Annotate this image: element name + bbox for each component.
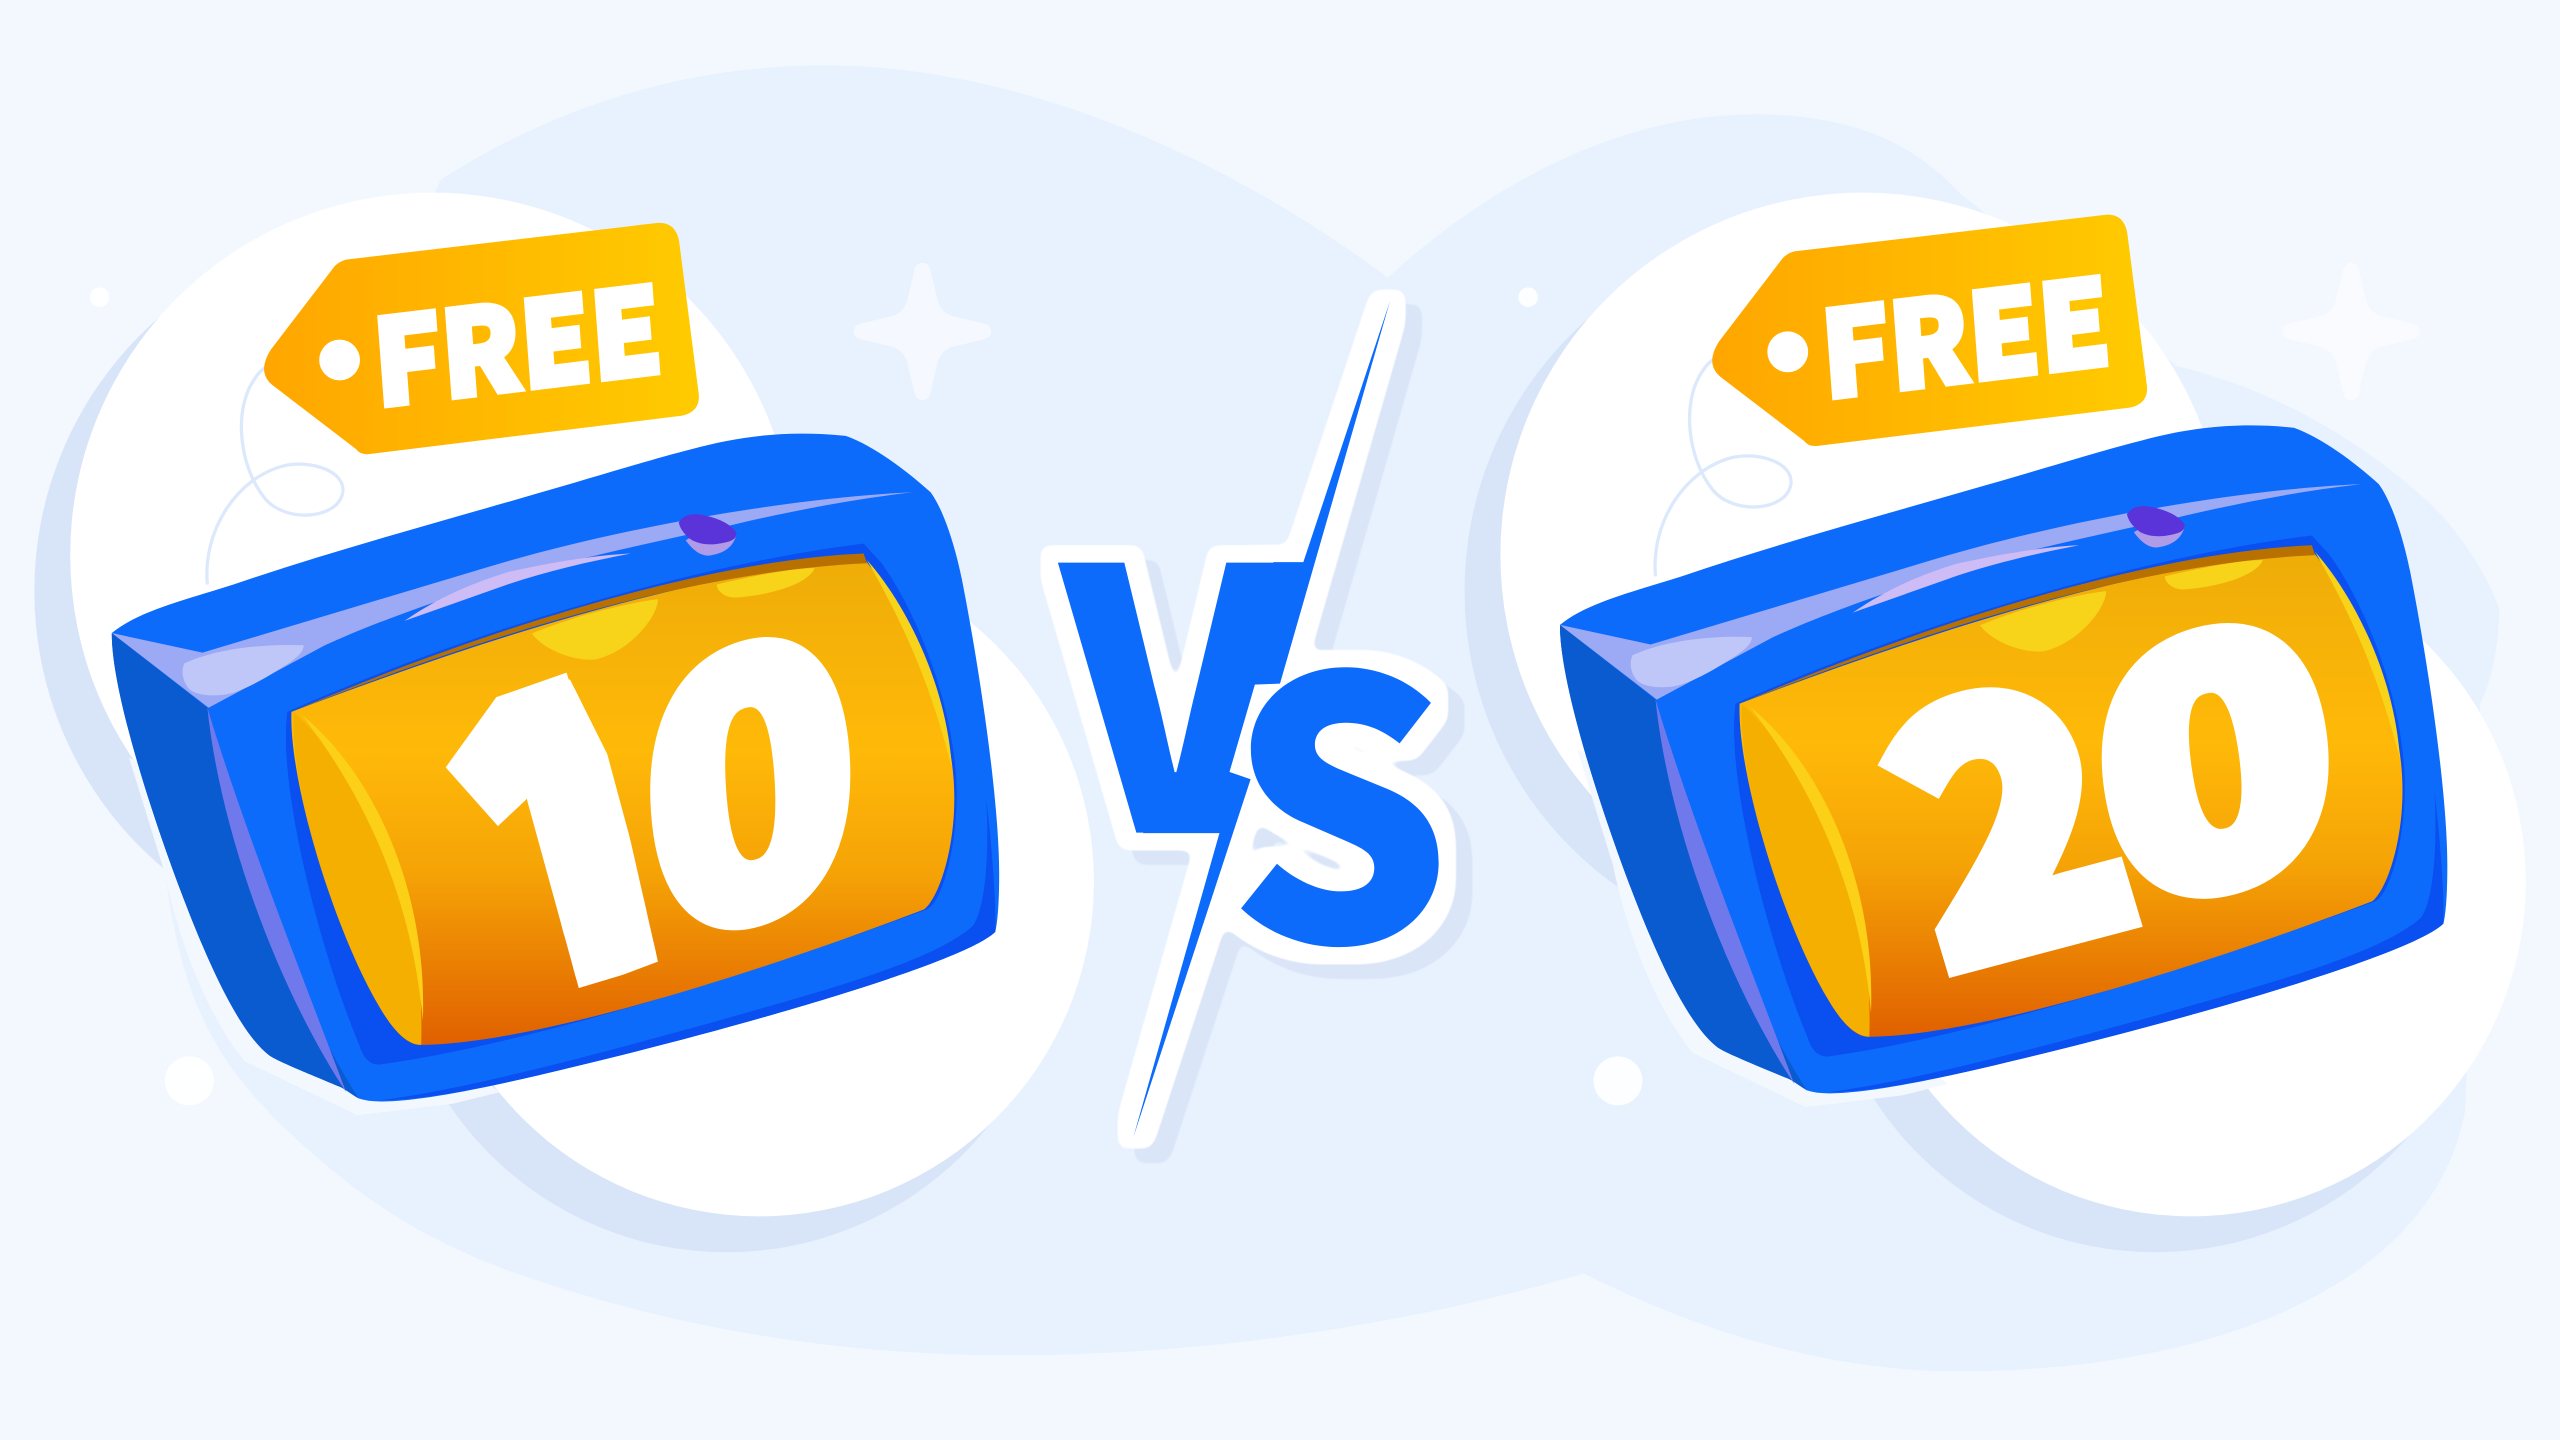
left box halo xyxy=(129,758,500,1115)
left knob xyxy=(679,514,736,556)
right screen side panel xyxy=(1742,704,1870,1037)
left screen xyxy=(291,558,954,1045)
VS letters: VS xyxy=(1056,412,1452,1047)
right prize group xyxy=(1560,215,2447,1107)
right knob xyxy=(2127,506,2185,547)
right price tag string xyxy=(1655,349,1791,576)
sparkle right xyxy=(2282,263,2420,400)
left bevel glare xyxy=(182,645,304,695)
right FREE tag: FREE xyxy=(1815,228,2115,433)
right number 20 xyxy=(1829,471,2359,1062)
left prize group xyxy=(112,223,999,1115)
left number 10 xyxy=(446,637,850,988)
right FREE tag xyxy=(1712,215,2147,446)
right backdrop white shapes xyxy=(1500,193,2526,1216)
left box outer edge shade xyxy=(379,798,995,1100)
decorative dots xyxy=(90,287,1642,1105)
VS lightning emblem xyxy=(1056,301,1452,1137)
left screen right stripe xyxy=(867,560,952,767)
left side face highlight xyxy=(207,708,346,1092)
right screen yellow stripe xyxy=(1750,707,1871,1012)
right top bevel highlight xyxy=(1560,484,2361,700)
right number 20: 2 xyxy=(1829,535,2174,1062)
right screen recess xyxy=(1734,536,2405,1056)
right box outer edge shade xyxy=(1827,790,2444,1092)
left lilac streak xyxy=(404,553,631,621)
right side face highlight xyxy=(1656,700,1794,1084)
left box body xyxy=(112,434,999,1108)
right screen right stripe xyxy=(2315,552,2400,759)
right lilac streak xyxy=(1853,545,2079,613)
left screen top shade xyxy=(291,553,867,712)
right box halo xyxy=(1577,749,1948,1107)
left box side face xyxy=(112,633,359,1098)
left FREE tag xyxy=(264,223,699,454)
left top bevel highlight xyxy=(112,492,913,708)
lightning bolt upper xyxy=(1224,301,1390,686)
left number 10: 0 xyxy=(626,470,871,1046)
right bevel glare xyxy=(1631,637,1752,687)
right screen xyxy=(1739,550,2402,1037)
left FREE tag: FREE xyxy=(367,236,667,441)
right backdrop shadows xyxy=(1464,229,2490,1252)
lightning bolt lower xyxy=(1133,767,1251,1137)
sparkle left xyxy=(854,263,991,400)
right screen top shade xyxy=(1740,545,2315,704)
left backdrop white shapes xyxy=(70,193,1094,1216)
left number 10: 1 xyxy=(383,509,751,1108)
left screen side panel xyxy=(294,712,421,1045)
right screen glints xyxy=(1980,560,2263,652)
left screen yellow stripe xyxy=(302,715,423,1020)
left screen recess xyxy=(286,544,957,1065)
left backdrop shadows xyxy=(34,229,1061,1252)
left price tag string xyxy=(207,357,343,584)
right number 20: 0 xyxy=(2064,471,2359,1004)
right box body xyxy=(1560,425,2447,1093)
left screen glints xyxy=(532,568,815,660)
right box side face xyxy=(1560,625,1807,1090)
